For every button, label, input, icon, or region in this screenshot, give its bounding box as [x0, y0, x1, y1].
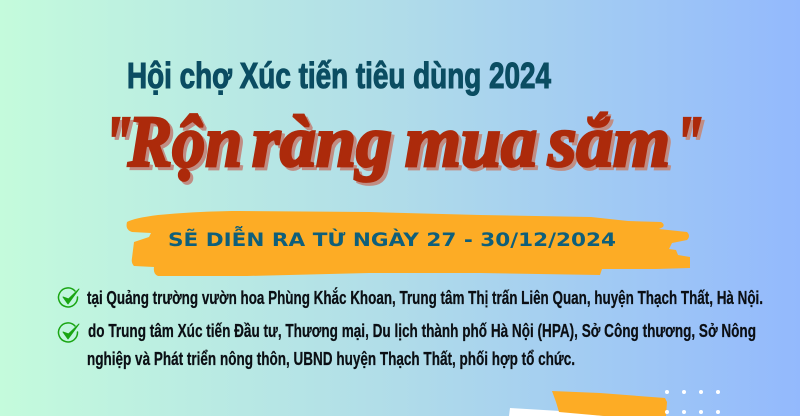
slogan shadow: ràng — [255, 104, 395, 185]
title: event name: Hội chợ Xúc tiến tiêu dùng 2024 — [127, 55, 551, 96]
slogan shadow: " — [106, 104, 136, 185]
icon: green check — [59, 288, 79, 307]
bullet 2: nghiệp và Phát triển nông thôn, UBND huyện Thạch Thất, phối hợp tổ chức. — [87, 349, 575, 369]
slogan text — [103, 101, 704, 182]
brush stroke background — [127, 211, 690, 276]
slogan text: sắm — [547, 101, 670, 182]
decoration: white dots — [665, 390, 720, 414]
slogan shadow: " — [677, 104, 707, 185]
slogan text: " — [674, 101, 704, 182]
bullet 2 — [59, 321, 756, 369]
slogan text: mua — [405, 101, 537, 182]
icon: green check — [59, 323, 79, 342]
slogan shadow: Rộn — [130, 104, 245, 185]
slogan heading — [103, 101, 707, 185]
slogan text: Rộn — [127, 101, 242, 182]
decoration: white sheet — [509, 408, 604, 416]
slogan shadow: mua — [408, 104, 540, 185]
slogan shadow: sắm — [550, 104, 673, 185]
date banner — [127, 211, 690, 276]
slogan shadow — [106, 104, 707, 185]
decoration: orange brush — [552, 391, 667, 416]
date text: SẼ DIỄN RA TỪ NGÀY 27 - 30/12/2024 — [168, 224, 616, 251]
slogan text: ràng — [252, 101, 392, 182]
bullet 1 — [59, 287, 763, 308]
slogan text: " — [103, 101, 133, 182]
